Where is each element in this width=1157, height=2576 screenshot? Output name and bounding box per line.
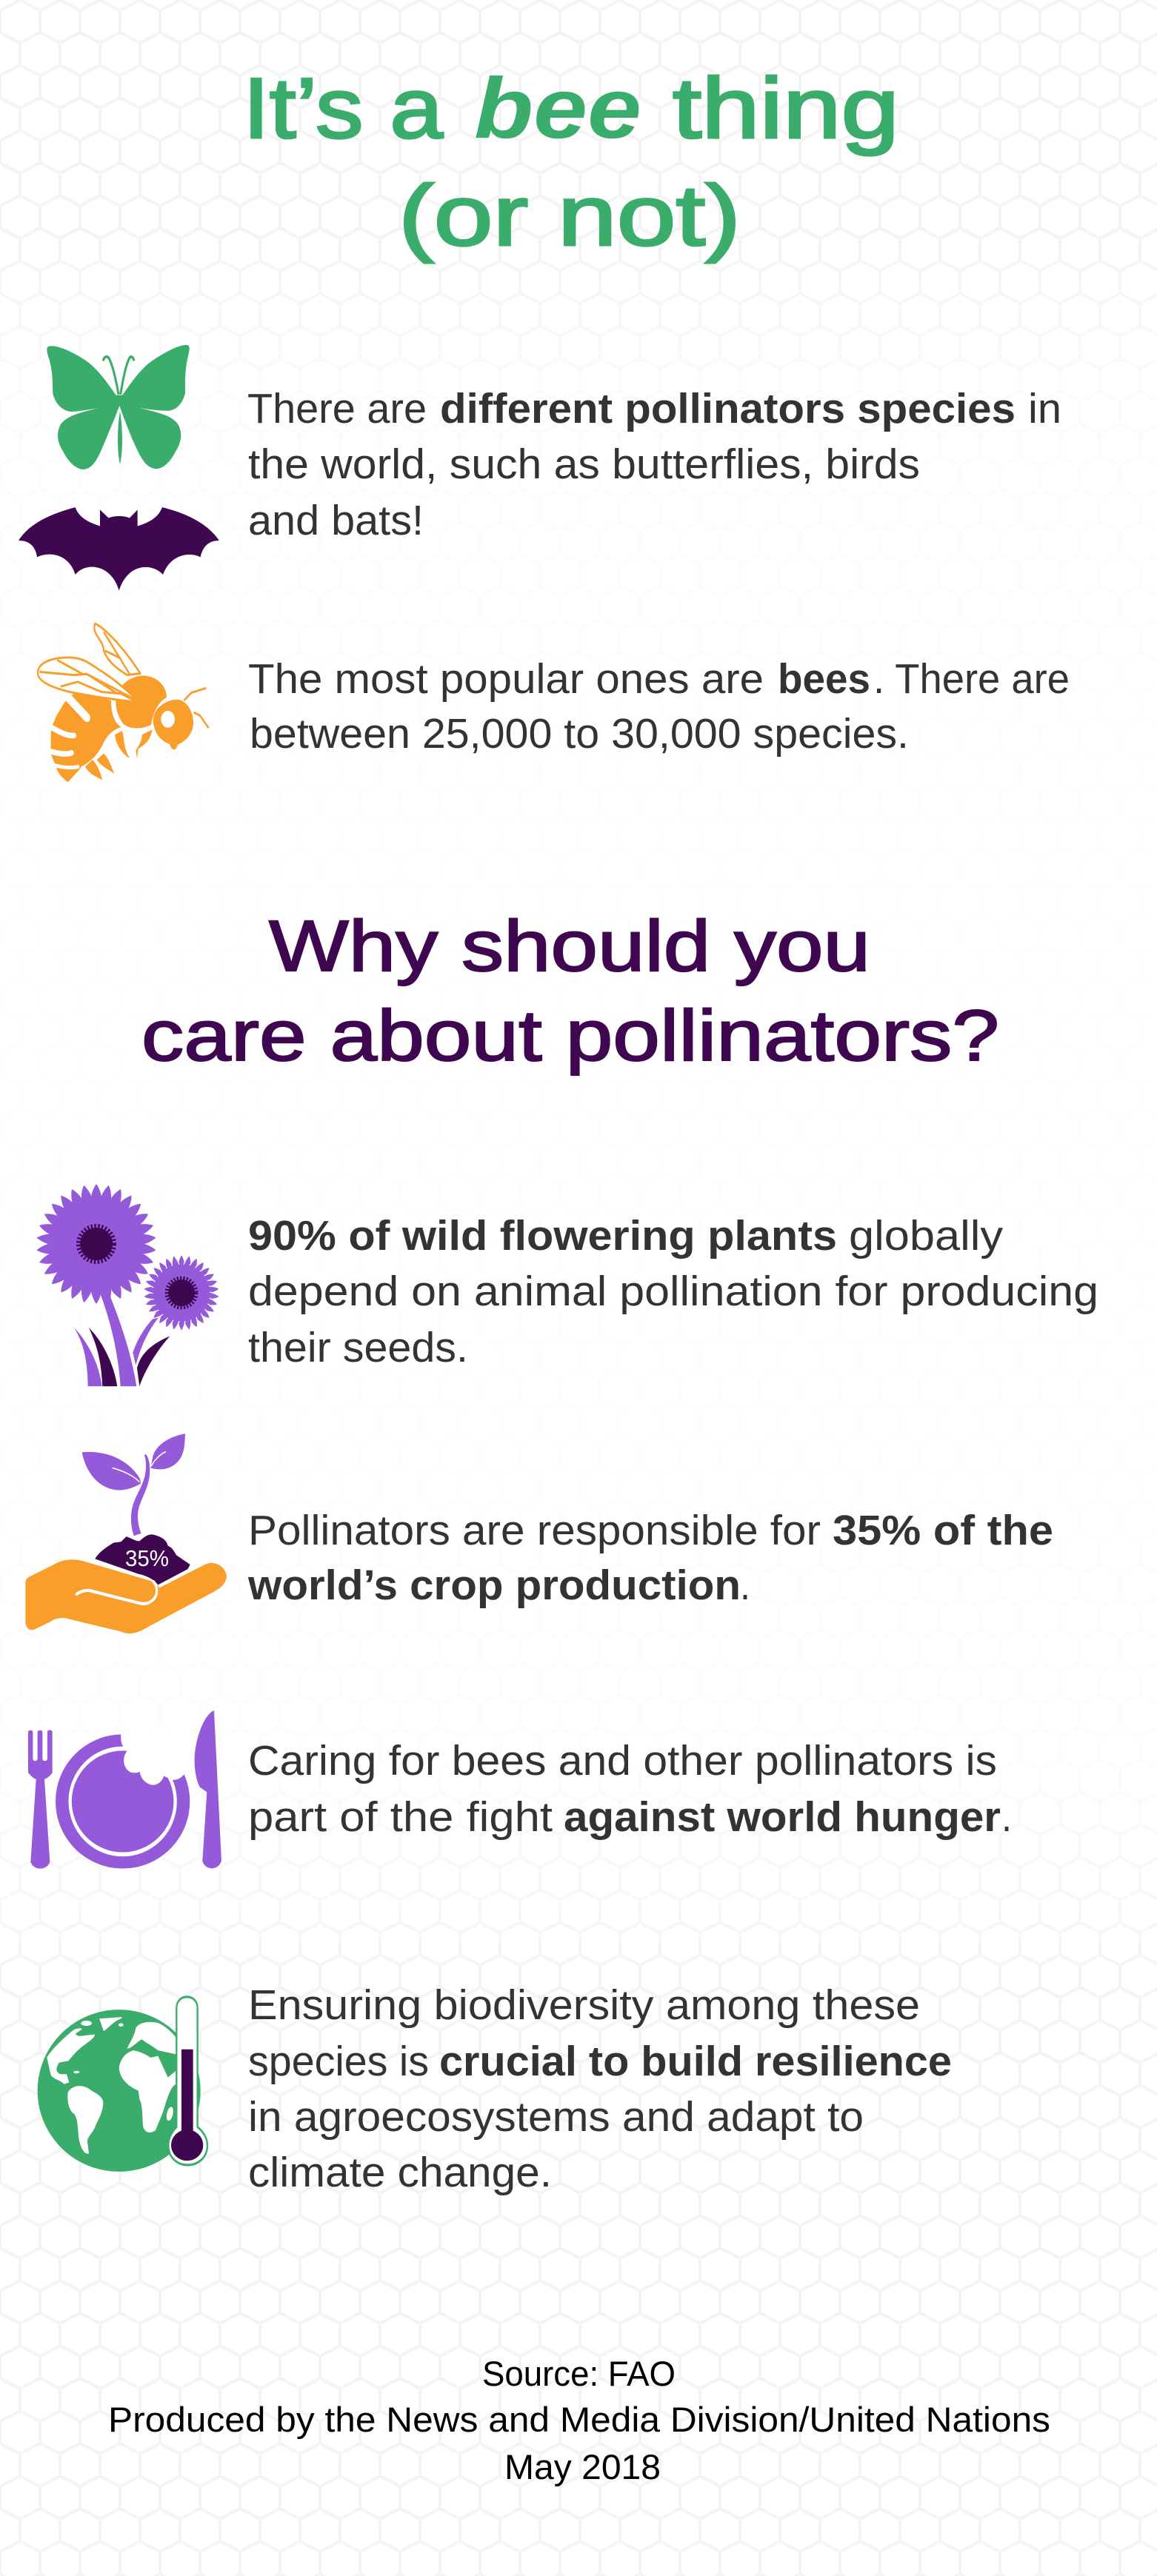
icon: hand with seedling, 35%: 35% xyxy=(125,1545,169,1571)
text: 90% of wild flowering plants: depend on animal pollination for producing xyxy=(248,1268,1098,1315)
text: against world hunger: Caring for bees and other pollinators is xyxy=(248,1737,997,1784)
title: thing xyxy=(673,60,899,156)
text: different pollinators: the world, such as butterflies, birds xyxy=(248,441,920,488)
source credits xyxy=(108,2354,1050,2486)
text: crucial to build resilience xyxy=(248,1981,952,2196)
text: different pollinators: There are xyxy=(247,385,427,432)
icon: plate, fork and knife xyxy=(28,1710,221,1869)
heading: why care xyxy=(141,906,999,1076)
text: most popular bees xyxy=(248,655,1070,757)
title: (or not) xyxy=(399,167,741,264)
title xyxy=(243,60,899,264)
text: 35% of crop production: . xyxy=(740,1562,750,1609)
source credits: May 2018 xyxy=(504,2447,661,2486)
title: bee xyxy=(474,60,641,156)
text: crucial to build resilience: climate change. xyxy=(248,2149,552,2196)
text: against world hunger xyxy=(248,1737,1012,1841)
text: crucial to build resilience: Ensuring biodiversity among these xyxy=(248,1981,920,2029)
text: against world hunger: part of the fight xyxy=(248,1793,553,1841)
source credits: Source: FAO xyxy=(482,2354,676,2393)
text: different pollinators: and bats! xyxy=(248,497,424,544)
title: It’s a xyxy=(243,60,444,156)
text: crucial to build resilience: species is xyxy=(248,2038,429,2085)
text: most popular bees: The most popular ones are xyxy=(248,655,764,703)
text: 90% of wild flowering plants: globally xyxy=(849,1212,1004,1259)
text: 90% of wild flowering plants: 90% of wild flowering plants xyxy=(248,1212,837,1259)
text: 90% of wild flowering plants xyxy=(248,1212,1098,1371)
text: 35% of crop production: world’s crop production xyxy=(247,1562,741,1609)
text: crucial to build resilience: in agroecosystems and adapt to xyxy=(248,2093,864,2141)
text: 35% of crop production: Pollinators are responsible for xyxy=(248,1507,821,1554)
icon: bee xyxy=(38,623,209,782)
text: most popular bees: between 25,000 to 30,000 species. xyxy=(250,710,909,757)
text: 90% of wild flowering plants: their seeds. xyxy=(248,1324,468,1371)
text: different pollinators: different pollinators species xyxy=(440,385,1016,432)
text: crucial to build resilience: crucial to build resilience xyxy=(439,2038,952,2085)
text: against world hunger: against world hunger xyxy=(564,1793,1001,1841)
text: 35% of crop production: 35% of the xyxy=(833,1507,1053,1554)
icon: hand with seedling, 35% xyxy=(25,1433,227,1633)
heading: why care: Why should you xyxy=(269,906,870,986)
text: 35% of crop production xyxy=(247,1507,1053,1609)
icon: bat xyxy=(19,507,219,591)
text: most popular bees: . There are xyxy=(873,655,1070,703)
icon: butterfly xyxy=(47,345,190,469)
text: different pollinators xyxy=(247,385,1061,544)
text: most popular bees: bees xyxy=(778,655,870,703)
heading: why care: care about pollinators? xyxy=(141,995,999,1076)
icon: flowers xyxy=(36,1184,220,1386)
source credits: Produced by the News and Media Division/United Nations xyxy=(108,2400,1050,2439)
text: against world hunger: . xyxy=(1001,1793,1012,1841)
text: different pollinators: in xyxy=(1028,385,1061,432)
icon: globe with thermometer xyxy=(38,1997,207,2172)
